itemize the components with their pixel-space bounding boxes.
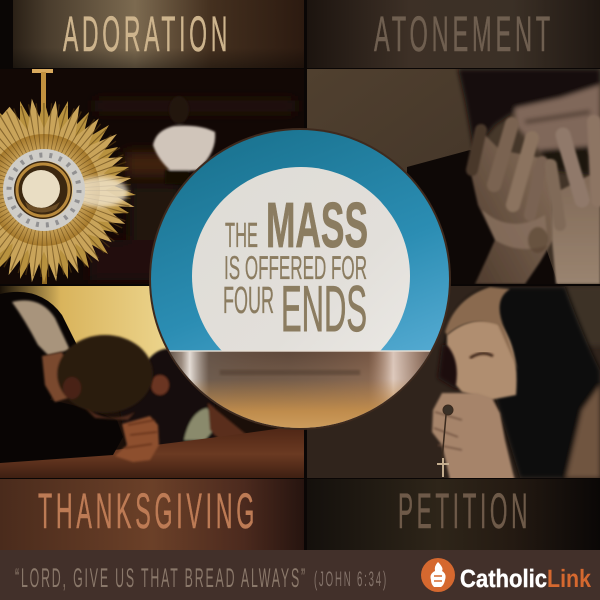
yellow wall: [2, 286, 167, 360]
banner: atonement: [307, 0, 600, 68]
banner: thanksgiving: [0, 479, 304, 550]
panel: thanksgiving photo: [0, 286, 304, 478]
dark shirt: [407, 150, 560, 290]
panel: adoration photo: [0, 69, 304, 294]
icon: golden monstrance: [0, 69, 136, 284]
title: the mass is offered for four ends: FOUR: [223, 280, 274, 322]
kneeling man in white shirt: [153, 96, 215, 184]
central circle illustration: ENDS: [281, 272, 367, 345]
pew: [0, 425, 304, 478]
title: the mass is offered for four ends: [223, 189, 368, 345]
title: the mass is offered for four ends: IS OFFERED FOR: [224, 249, 367, 286]
central circle illustration: [140, 128, 460, 441]
silver ring: [9, 155, 79, 225]
banner: adoration: ADORATION: [63, 6, 231, 62]
church pews background: [90, 100, 295, 280]
monstrance rays: [0, 98, 136, 282]
clasped hands: [432, 393, 515, 480]
banner: thanksgiving: THANKSGIVING: [38, 483, 258, 539]
panel: atonement photo: [307, 69, 600, 290]
banner: petition: [307, 479, 600, 550]
panel: petition photo: [307, 286, 600, 480]
title: the mass is offered for four ends: MASS: [266, 189, 368, 261]
title: the mass is offered for four ends: THE: [225, 216, 258, 255]
right hand: [551, 122, 600, 284]
communion host: [192, 167, 410, 351]
blue sky disc: [151, 130, 449, 428]
face: [447, 320, 517, 400]
logo: catholic link: [421, 558, 591, 593]
chalice bowl: [169, 350, 431, 428]
left hand: [469, 124, 553, 284]
black robed body and arm: [0, 292, 123, 463]
footer bar: (JOHN 6:34): [314, 568, 388, 591]
wordmark accent: Link: [547, 565, 591, 593]
footer bar: [0, 550, 600, 600]
eye: [470, 353, 493, 358]
circle outline: [149, 128, 451, 430]
banner: adoration: [13, 0, 304, 68]
beige hood: [12, 300, 70, 355]
wordmark: Catholic: [460, 565, 547, 593]
gold ring and host: [14, 161, 72, 219]
icon: flame cup: [421, 558, 455, 592]
hair and head: [458, 69, 600, 175]
head: [42, 335, 153, 420]
light hair over forehead: [445, 287, 518, 370]
monstrance stem and cross: [32, 69, 53, 284]
wall highlight: [565, 286, 600, 346]
folded hands: [115, 416, 159, 462]
second worshipper behind: [148, 347, 246, 442]
woman's hair: [438, 287, 600, 478]
rosary: [437, 405, 453, 477]
